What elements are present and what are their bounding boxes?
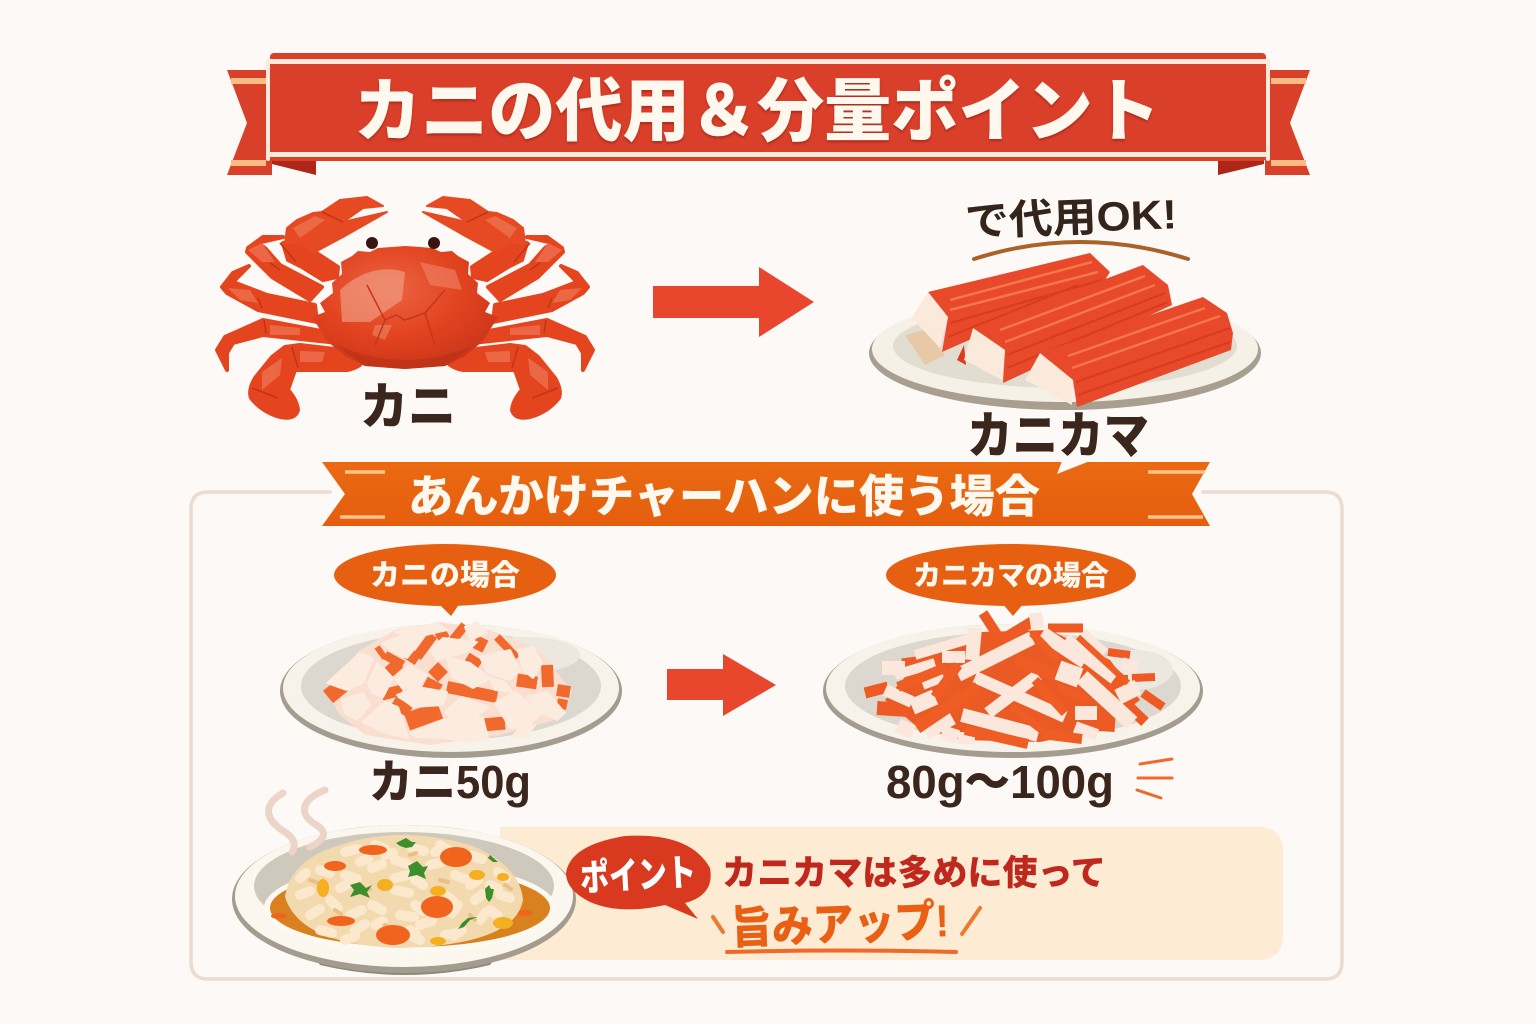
stick 3 <box>1025 297 1233 407</box>
label: kanikama 80-100g: 80g〜100g <box>886 756 1114 808</box>
crab meat orange pieces <box>328 625 570 725</box>
title ribbon <box>227 53 1310 175</box>
sauce <box>270 869 550 947</box>
shredded accent orange strips <box>898 633 1128 744</box>
illustration: crab meat plate <box>280 622 622 758</box>
heading: substitute OK <box>964 191 1188 259</box>
crab shell <box>312 246 498 369</box>
callout: point bubble <box>566 836 711 919</box>
vegetables <box>271 845 532 945</box>
heading: substitute OK: で代用OK! <box>964 191 1178 245</box>
stick 2 <box>957 265 1172 383</box>
stick 1 <box>912 253 1110 352</box>
label: crab: カニ <box>360 379 456 435</box>
icon: sparkle lines <box>713 908 980 934</box>
callout: kanikama case <box>886 544 1136 616</box>
illustration: shredded kanikama plate <box>823 613 1203 758</box>
callout: crab case <box>334 544 556 616</box>
label: kanikama: カニカマ <box>967 408 1149 464</box>
callout: crab case: カニの場合 <box>370 559 520 592</box>
callout: point bubble: ポイント <box>579 852 697 899</box>
section ribbon <box>322 461 1210 526</box>
shredded white pieces <box>882 620 1138 738</box>
icon: emphasis lines <box>1137 759 1172 798</box>
shredded orange pieces <box>865 613 1163 725</box>
illustration: kanikama on plate <box>869 253 1261 410</box>
rice <box>285 835 523 948</box>
crab eyes <box>366 237 440 249</box>
callout: kanikama case: カニカマの場合 <box>913 560 1109 591</box>
label: crab 50g: カニ50g <box>369 756 531 808</box>
text: use more kanikama: カニカマは多めに使って <box>722 854 1106 893</box>
section ribbon text: あんかけチャーハンに使う場合 <box>408 471 1040 522</box>
arrow: crab amount to kanikama amount <box>667 654 776 716</box>
crab illustration <box>217 197 593 418</box>
text: umami up: 旨みアップ! <box>730 895 950 954</box>
crab meat white chunks <box>327 622 565 742</box>
illustration: fried rice with sauce <box>232 790 576 975</box>
panel: lower frame <box>191 492 1342 979</box>
arrow: crab to kanikama <box>653 267 814 337</box>
icon: steam <box>269 790 325 852</box>
panel: point message <box>500 827 1283 960</box>
title text: カニの代用＆分量ポイント <box>354 73 1160 150</box>
